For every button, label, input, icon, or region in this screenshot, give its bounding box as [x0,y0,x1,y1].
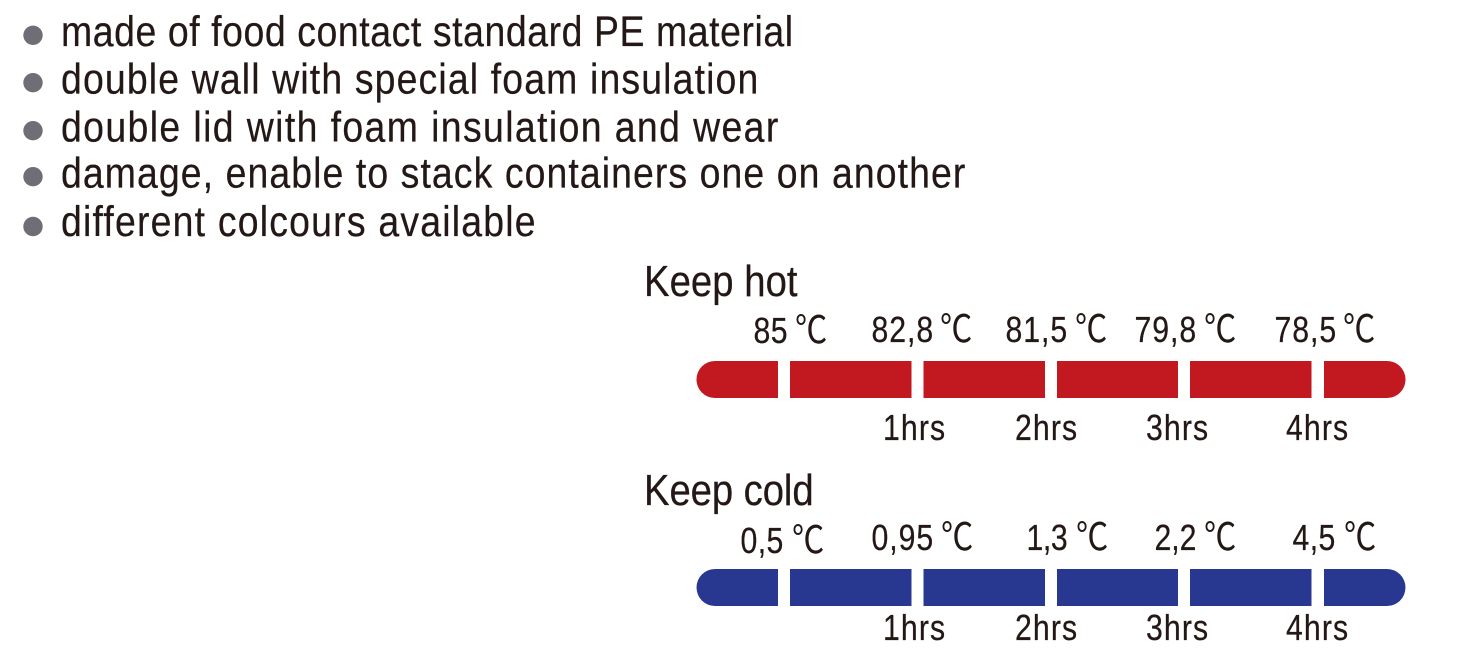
keep cold temperatures: ℃ [792,510,824,565]
feature list [23,8,965,246]
keep hot bar [697,361,1406,398]
keep cold time labels: 2hrs [1015,609,1077,649]
bullet 3: double lid with foam insulation and wear [61,103,778,151]
keep hot temperatures: 81,5 [1006,311,1067,351]
keep cold temperatures: 2,2 [1154,519,1197,559]
keep hot temperatures [754,299,1375,355]
keep hot temperatures: ℃ [1204,299,1236,354]
keep hot time labels [883,409,1348,449]
keep cold temperatures: ℃ [1204,507,1236,562]
bullet 2: double wall with special foam insulation [61,55,758,103]
heading: keep cold: Keep cold [644,466,814,515]
heading: keep hot: Keep hot [644,257,798,306]
keep hot temperatures: ℃ [795,300,827,355]
keep cold time labels [883,609,1348,649]
keep cold temperatures: ℃ [1076,507,1108,562]
keep cold time labels: 1hrs [883,609,945,649]
keep cold temperatures: 0,5 [740,522,783,562]
keep hot temperatures: ℃ [1075,299,1107,354]
keep hot temperatures: 79,8 [1134,311,1196,351]
bullet 1: made of food contact standard PE material [61,8,793,56]
keep hot temperatures: ℃ [940,299,972,354]
keep cold temperatures: 4,5 [1292,519,1335,559]
keep hot temperatures: 78,5 [1274,311,1336,351]
keep hot temperatures: ℃ [1343,299,1375,354]
keep cold time labels: 4hrs [1286,609,1348,649]
keep cold bar [697,569,1405,606]
keep cold temperatures: 1,3 [1026,519,1068,559]
keep hot time labels: 3hrs [1146,409,1208,449]
keep hot time labels: 1hrs [883,409,945,449]
keep cold temperatures: 0,95 [872,519,933,559]
keep cold temperatures [740,507,1376,565]
keep hot temperatures: 85 [754,312,788,352]
keep hot temperatures: 82,8 [872,311,933,351]
keep cold time labels: 3hrs [1146,609,1208,649]
keep hot time labels: 2hrs [1015,409,1077,449]
keep cold temperatures: ℃ [941,507,973,562]
bullet 5: different colcours available [61,198,536,246]
keep cold temperatures: ℃ [1344,507,1376,562]
keep hot time labels: 4hrs [1286,409,1348,449]
bullet 4: damage, enable to stack containers one on another [61,149,965,197]
